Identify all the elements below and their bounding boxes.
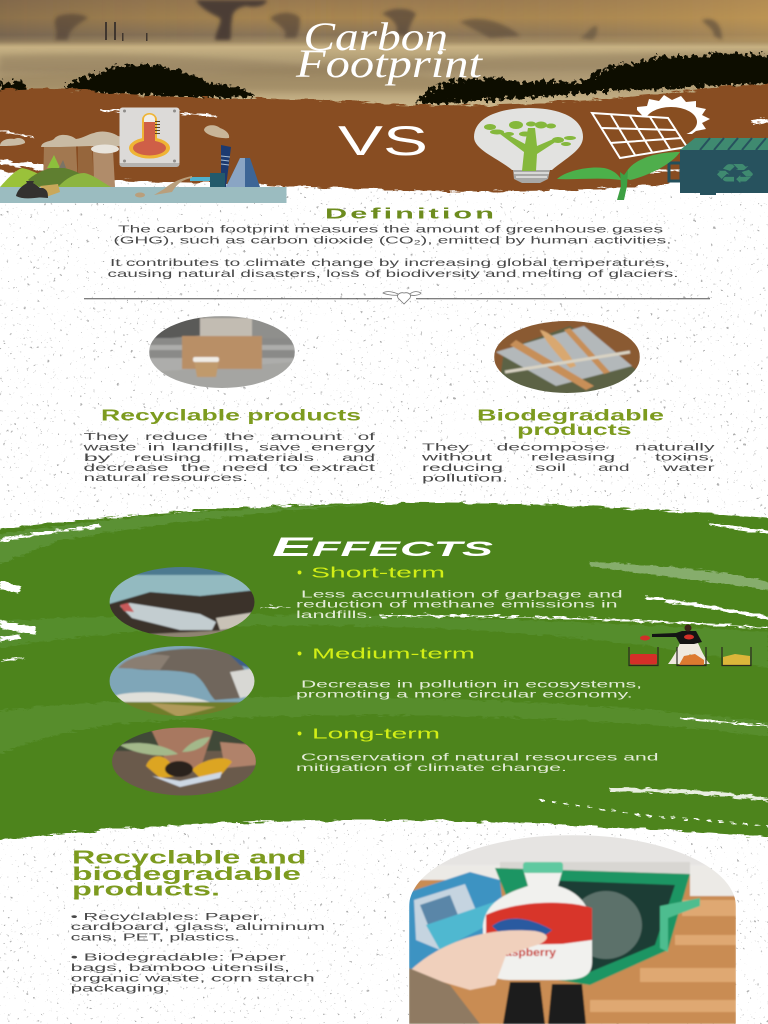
recyclables list: cans, PET, plastics. xyxy=(71,931,240,943)
header: polluted landscape photo xyxy=(0,0,768,112)
text block: extract xyxy=(309,462,375,474)
photo: bamboo utensils xyxy=(494,320,640,394)
long-term text: mitigation of climate change. xyxy=(296,762,567,774)
text block: (GHG), such as carbon dioxide (CO₂), emitted by human activities. xyxy=(114,235,672,247)
biodegradable list: bags, bamboo utensils, xyxy=(71,962,290,974)
text block: natural resources. xyxy=(84,472,248,484)
icon: light bulb with tree xyxy=(474,108,583,183)
icon: person sorting waste into bins xyxy=(629,624,751,666)
header: tree silhouettes xyxy=(0,53,768,104)
text block: It contributes to climate change by increasing global temperatures, xyxy=(110,257,670,269)
title: Carbon xyxy=(304,14,448,59)
panel: biodegradable products xyxy=(420,320,716,485)
medium-term text: Medium-term xyxy=(312,647,475,663)
long-term text: Long-term xyxy=(312,727,440,743)
heading: E FFECTS xyxy=(272,532,493,562)
recyclables list xyxy=(71,911,325,943)
text block: the xyxy=(181,462,211,474)
biodegradable list: • Biodegradable: Paper xyxy=(71,952,287,964)
text block: They xyxy=(84,431,130,443)
text block: amount xyxy=(270,431,342,443)
biodegradable list: organic waste, corn starch xyxy=(71,972,315,984)
biodegradable list: packaging. xyxy=(71,982,170,994)
text block: waste xyxy=(82,441,137,453)
text block: naturally xyxy=(635,442,716,454)
short-term text: reduction of methane emissions in xyxy=(296,599,618,611)
text block: energy xyxy=(311,441,376,453)
medium-term text xyxy=(296,647,642,701)
biodegradable list xyxy=(71,952,315,994)
icon: green sprout xyxy=(557,152,680,200)
text block: reducing xyxy=(422,462,503,474)
heading: Recyclable products xyxy=(101,408,361,424)
text block: pollution. xyxy=(422,473,508,485)
text block: and xyxy=(598,462,630,474)
heading: Recyclable and xyxy=(72,846,306,867)
trash bags xyxy=(16,181,60,198)
title xyxy=(295,14,483,86)
text block: decrease xyxy=(84,462,169,474)
medium-term text: • xyxy=(297,647,302,663)
title: Footprint xyxy=(295,41,483,86)
photo: plastic bottle on shore xyxy=(109,566,256,640)
short-term text: • xyxy=(297,566,302,582)
photo: hands holding seedling xyxy=(111,727,258,797)
text block: save xyxy=(259,441,301,453)
heading: biodegradable xyxy=(72,863,301,884)
short-term text: landfills. xyxy=(296,609,373,621)
heading: Definition xyxy=(325,206,497,222)
factory xyxy=(210,145,260,187)
text block: They xyxy=(422,442,471,454)
text block: causing natural disasters, loss of biodiversity and melting of glaciers. xyxy=(108,268,678,280)
VS label: VS xyxy=(338,117,428,164)
medium-term text: promoting a more circular economy. xyxy=(296,689,633,701)
heading: products. xyxy=(72,879,220,900)
cooling towers xyxy=(0,125,229,187)
medium-term text: Decrease in pollution in ecosystems, xyxy=(301,678,642,690)
text block: soil xyxy=(535,462,566,474)
text block: reusing xyxy=(134,452,201,464)
short-term text xyxy=(296,566,623,621)
divider with ornament xyxy=(84,292,710,304)
green hills xyxy=(0,155,111,187)
text block: water xyxy=(661,462,715,474)
text block: to xyxy=(279,462,298,474)
text block: in xyxy=(148,441,165,453)
text block xyxy=(420,442,716,485)
icon: recycling dumpster xyxy=(669,138,768,195)
icon: solar panel and sun xyxy=(591,95,710,158)
text block: materials xyxy=(228,452,314,464)
text block xyxy=(82,431,376,484)
recyclables list: cardboard, glass, aluminum xyxy=(71,921,325,933)
text block: releasing xyxy=(531,452,615,464)
icon: thermometer card xyxy=(120,108,180,167)
text block: the xyxy=(225,431,255,443)
text block xyxy=(108,224,678,280)
recyclables list: • Recyclables: Paper, xyxy=(71,911,264,923)
panel: recyclable products xyxy=(82,316,376,484)
text block: decompose xyxy=(496,442,606,454)
header: white brush streaks xyxy=(0,110,768,172)
icon: recycling dumpster: ♻ xyxy=(713,159,757,190)
text block: of xyxy=(358,431,375,443)
river xyxy=(0,187,286,203)
photo: hand holding bottle over recycling bag xyxy=(409,835,736,1024)
text block: landfills, xyxy=(172,441,250,453)
short-term text: Less accumulation of garbage and xyxy=(301,588,623,600)
long-term text xyxy=(296,727,659,774)
pipe and sludge xyxy=(135,176,210,198)
text block: without xyxy=(420,452,492,464)
photo: hand holding bottle over recycling bag: aspberry xyxy=(505,947,557,959)
panel: recyclable and biodegradable products list xyxy=(71,835,736,1024)
heading xyxy=(72,846,306,900)
heading xyxy=(477,408,665,439)
white brush streaks xyxy=(0,524,768,826)
lighter brush strokes xyxy=(0,504,768,756)
panel: effects green brush band xyxy=(0,503,768,842)
text block: The carbon footprint measures the amount of greenhouse gases xyxy=(118,224,663,236)
text block: and xyxy=(342,452,375,464)
photo: paper bag and cup xyxy=(149,316,295,390)
header: brown brush band xyxy=(0,83,768,191)
heading: products xyxy=(517,422,632,439)
long-term text: Conservation of natural resources and xyxy=(301,752,659,764)
heading: Biodegradable xyxy=(477,408,665,424)
photo: factory smoke xyxy=(109,645,256,717)
long-term text: • xyxy=(297,727,302,743)
icon: polluted river scene xyxy=(0,125,286,203)
short-term text: Short-term xyxy=(311,566,445,582)
text block: need xyxy=(222,462,268,474)
text block: by xyxy=(84,452,112,464)
text block: toxins, xyxy=(655,452,714,464)
text block: reduce xyxy=(145,431,208,443)
section: definition xyxy=(108,206,678,280)
